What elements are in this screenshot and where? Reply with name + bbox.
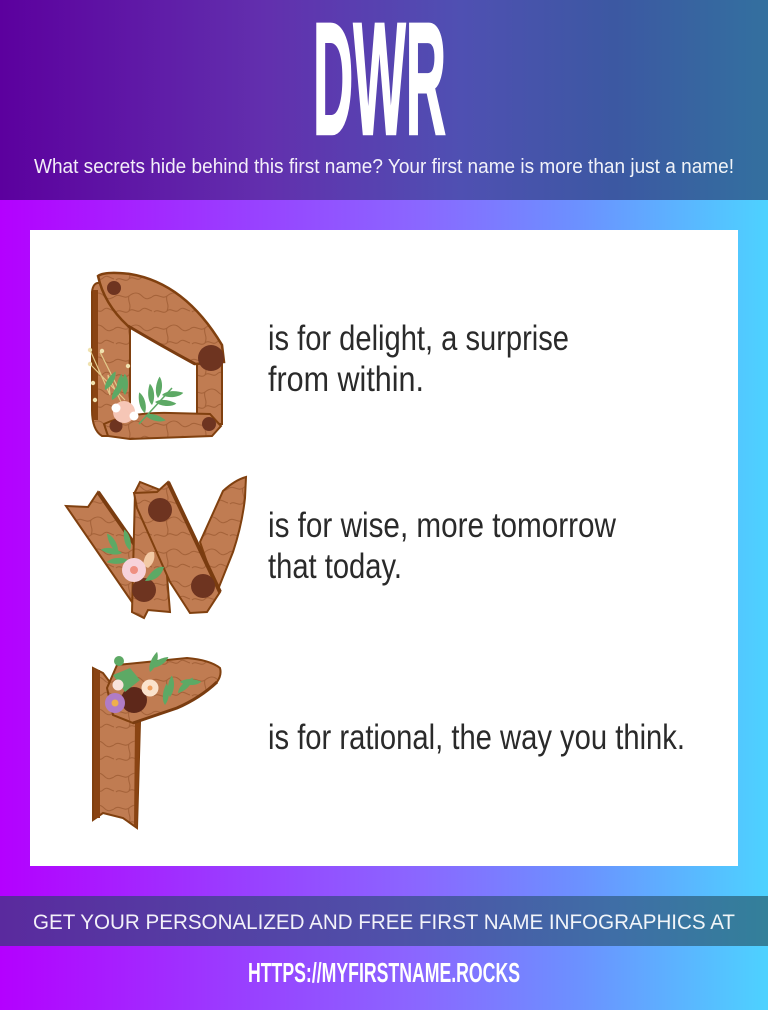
text: W meaning: that today. [268,547,402,586]
icon: leaves and blossoms on D [88,348,183,425]
icon: wooden letter D [88,273,224,439]
footer call to action: GET YOUR PERSONALIZED AND FREE FIRST NAME INFOGRAPHICS AT [33,911,735,934]
icon: flowers and leaves on R [105,651,202,713]
text: R meaning: is for rational, the way you think. [268,718,685,757]
text: D meaning [268,319,569,399]
text: D meaning: is for delight, a surprise [268,319,569,358]
subtitle: What secrets hide behind this first name? Your first name is more than just a name! [34,156,734,178]
header band [0,0,768,200]
panel: white content card [30,230,738,866]
text: D meaning: from within. [268,360,424,399]
footer url: HTTPS://MYFIRSTNAME.ROCKS [248,957,520,988]
icon: wooden letter R [93,651,221,828]
icon: wooden letter W [66,477,246,618]
text: W meaning [268,506,617,586]
icon: flower and leaves on W [101,529,164,582]
text: W meaning: is for wise, more tomorrow [268,506,617,545]
footer band [0,896,768,946]
